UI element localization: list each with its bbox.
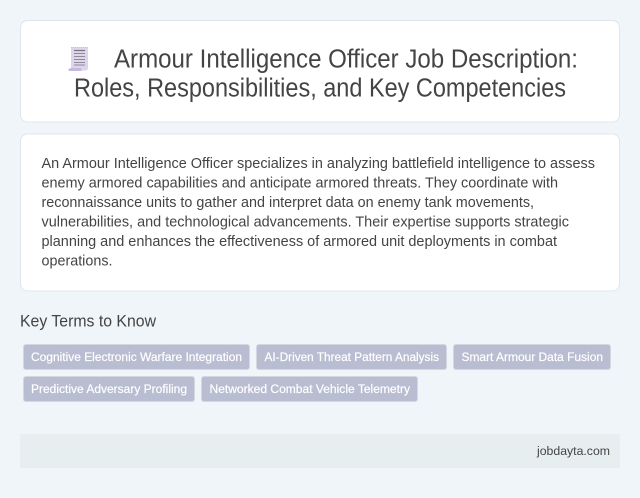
footer bar <box>20 434 620 468</box>
text block: description: reconnaissance units to gather and interpret data on enemy tank movements, <box>42 195 534 211</box>
tag: AI-Driven Threat Pattern Analysis <box>256 344 446 370</box>
text block: description: operations. <box>42 254 112 270</box>
tag: Smart Armour Data Fusion <box>454 344 610 370</box>
text block: description: enemy armored capabilities and anticipate armored threats. They coordinate with <box>42 176 558 192</box>
text block: description: planning and enhances the effectiveness of armored unit deployments in combat <box>42 234 557 250</box>
panel: description card <box>20 134 620 291</box>
tag: Cognitive Electronic Warfare Integration <box>24 344 250 370</box>
heading: title <box>74 46 578 102</box>
text block: description: An Armour Intelligence Officer specializes in analyzing battlefield intelligence to assess <box>42 156 595 172</box>
tag: Predictive Adversary Profiling: Predictive Adversary Profiling <box>31 382 187 396</box>
tag: Networked Combat Vehicle Telemetry <box>202 376 418 402</box>
tag: Smart Armour Data Fusion: Smart Armour Data Fusion <box>462 350 603 364</box>
footer bar: jobdayta.com <box>536 444 610 458</box>
text block: description: vulnerabilities, and technological advancements. Their expertise supports strategic <box>42 214 569 230</box>
icon: scroll document <box>68 47 88 71</box>
heading: title: Armour Intelligence Officer Job Description: <box>114 46 578 74</box>
text block: description <box>42 156 595 270</box>
tag: AI-Driven Threat Pattern Analysis: AI-Driven Threat Pattern Analysis <box>264 350 439 364</box>
tag: Cognitive Electronic Warfare Integration: Cognitive Electronic Warfare Integration <box>31 350 242 364</box>
heading: title: Roles, Responsibilities, and Key Competencies <box>74 74 566 102</box>
tag: Networked Combat Vehicle Telemetry: Networked Combat Vehicle Telemetry <box>210 382 411 396</box>
heading: key terms: Key Terms to Know <box>20 312 156 330</box>
panel: title card <box>20 20 620 122</box>
tag: Predictive Adversary Profiling <box>24 376 194 402</box>
